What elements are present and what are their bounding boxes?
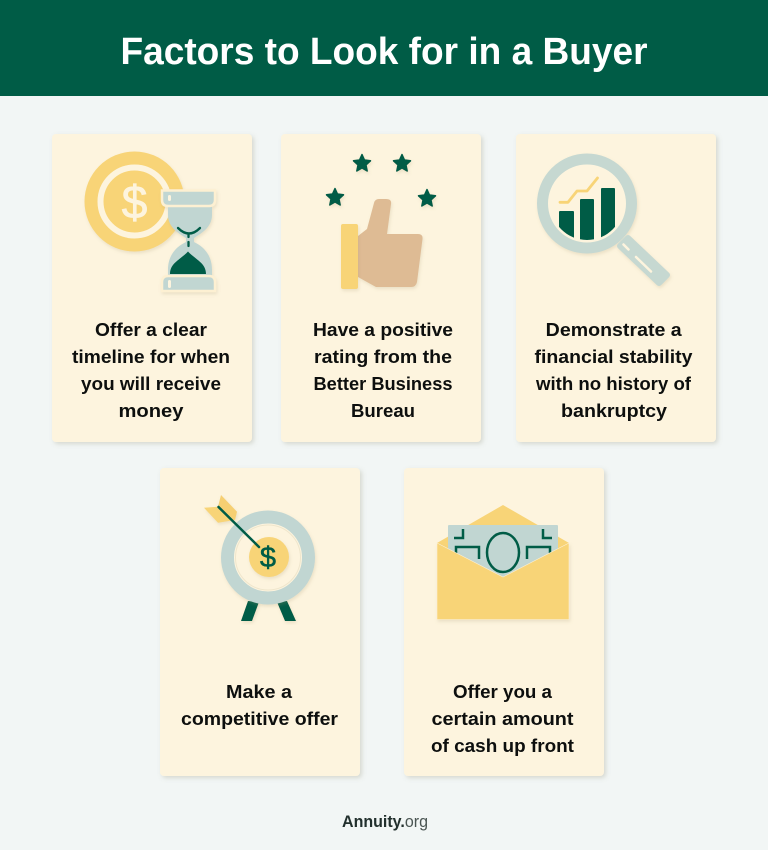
icon: coin and hourglass <box>84 152 215 291</box>
icon: magnifying glass with chart <box>542 159 667 283</box>
text: cash up front: of cash up front <box>431 735 574 756</box>
title banner <box>0 0 768 96</box>
text: clear timeline: you will receive <box>81 373 221 394</box>
text: positive rating: Bureau <box>351 400 415 421</box>
text: positive rating: Have a positive <box>313 319 453 340</box>
logo: Annuity.org: Annuity.org <box>342 812 428 831</box>
panel: financial stability <box>516 134 716 442</box>
text: cash up front <box>431 681 574 756</box>
text: clear timeline: money <box>118 400 184 421</box>
text: cash up front: certain amount <box>432 708 574 729</box>
title: Factors to Look for in a Buyer <box>120 31 648 73</box>
icon: thumbs up with stars <box>326 154 436 289</box>
icon: envelope with cash <box>437 505 569 620</box>
icon: target with arrow: $ <box>260 542 276 574</box>
text: clear timeline: Offer a clear <box>95 319 207 340</box>
panel: positive rating <box>281 134 481 442</box>
text: competitive offer <box>181 681 338 729</box>
text: competitive offer: competitive offer <box>181 708 338 729</box>
text: positive rating: Better Business <box>314 373 452 394</box>
panel: competitive offer <box>160 468 360 776</box>
icon: banknote <box>448 525 558 585</box>
text: clear timeline: timeline for when <box>72 346 230 367</box>
text: financial stability: financial stability <box>534 346 693 367</box>
text: positive rating: rating from the <box>314 346 452 367</box>
text: positive rating <box>313 319 453 421</box>
text: financial stability: bankruptcy <box>561 400 668 421</box>
text: financial stability: Demonstrate a <box>546 319 682 340</box>
text: cash up front: Offer you a <box>453 681 553 702</box>
icon: coin and hourglass: $ <box>122 176 147 228</box>
text: financial stability <box>534 319 693 421</box>
panel: cash up front <box>404 468 604 776</box>
text: competitive offer: Make a <box>226 681 293 702</box>
icon: target with arrow <box>204 495 308 621</box>
panel: clear timeline <box>52 134 252 442</box>
icon: arrow fletching <box>204 495 237 523</box>
text: clear timeline <box>72 319 230 421</box>
text: financial stability: with no history of <box>535 373 692 394</box>
